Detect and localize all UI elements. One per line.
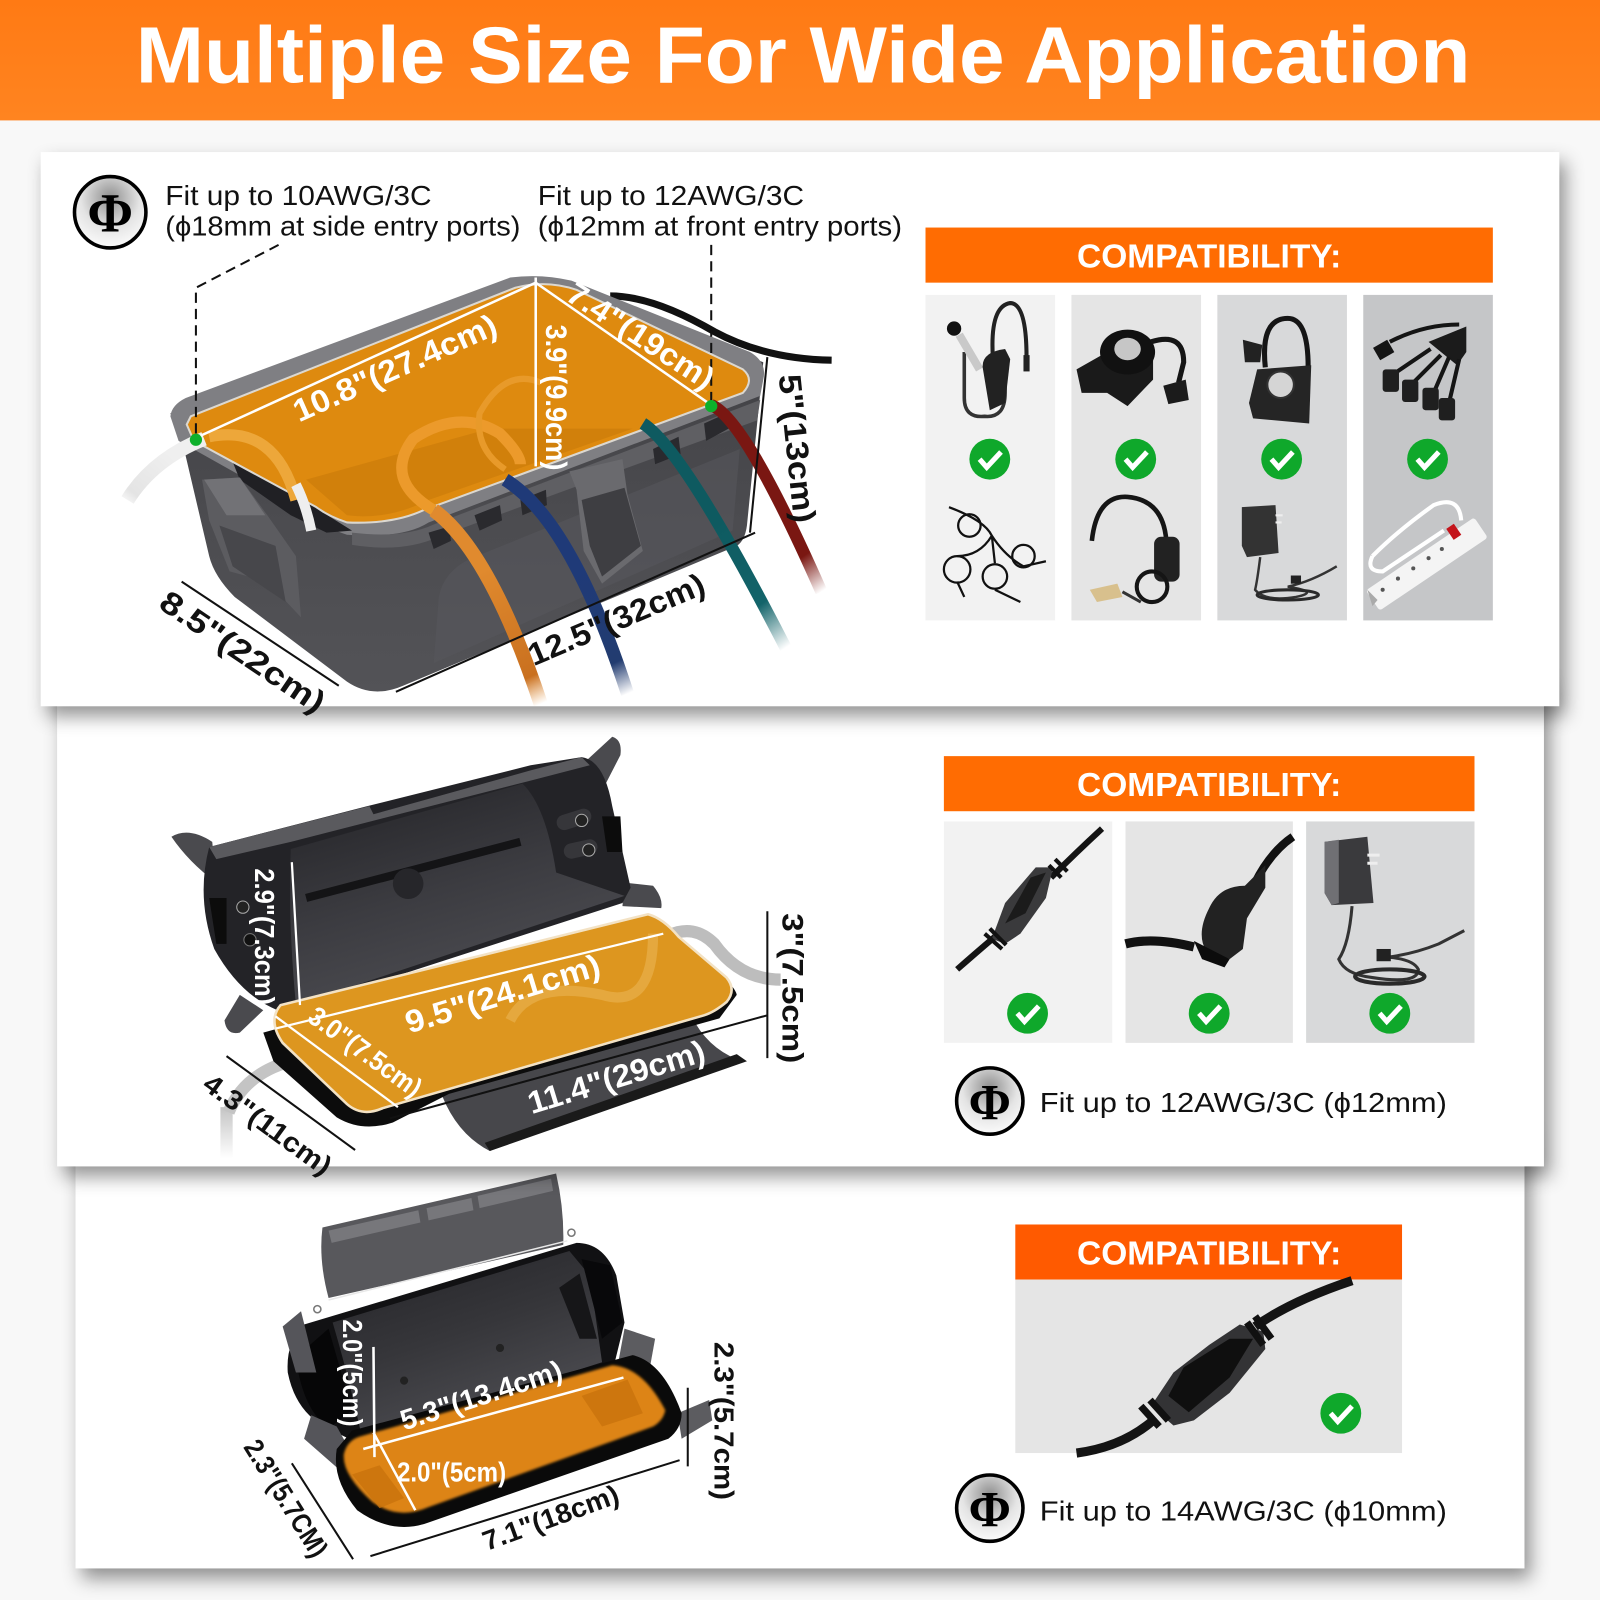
device: inline connector: [944, 821, 1112, 1043]
medium box product image: 3"(7.5cm): [776, 913, 809, 1063]
dark interior at front-left corner: [230, 454, 352, 533]
medium box product image: 11.4"(29cm): [523, 1033, 709, 1121]
black measure lines: [182, 357, 767, 692]
heading: [1015, 1224, 1402, 1280]
orange opening: [187, 284, 749, 523]
panel: medium box: [57, 673, 1544, 1181]
white measure lines: [194, 278, 711, 466]
panel: large box: [41, 152, 1559, 720]
medium box product image: 4.3"(11cm): [197, 1068, 338, 1181]
tabs on lower half: [304, 1415, 352, 1467]
small box product image: 7.1"(18cm): [478, 1479, 623, 1557]
orange inner tray: [344, 1365, 665, 1513]
heading: [944, 756, 1474, 811]
blue cable: [505, 480, 628, 694]
clip ears: [171, 737, 662, 1033]
small box product image: [238, 1173, 739, 1563]
cable size note: [957, 1068, 1447, 1134]
check icon: [1261, 439, 1302, 480]
compatibility block: small box: [957, 1224, 1447, 1541]
compatibility block: medium box: [944, 756, 1474, 1134]
check icon: [1369, 993, 1410, 1034]
title: Multiple Size For Wide Application: [136, 11, 1470, 100]
check icon: [1189, 993, 1230, 1034]
fabric flap: [439, 1010, 737, 1151]
black measure lines: [292, 1388, 688, 1559]
cable size note: side and front ports: (ϕ12mm at front entry ports): [538, 211, 902, 242]
device photo: inline cord connector: [1015, 1280, 1402, 1453]
teal cable: [643, 423, 786, 648]
latches and clips: [202, 478, 301, 617]
large box product image: 5"(13cm): [772, 372, 823, 524]
rim: [170, 276, 764, 536]
small box product image: 2.0"(5cm): [397, 1457, 506, 1488]
open lid: [204, 757, 631, 1010]
white cable: [128, 439, 204, 500]
cable size note: side and front ports: [74, 177, 902, 248]
labels: 10.8"(27.4cm): [287, 307, 502, 429]
check icon: [969, 439, 1010, 480]
heading: COMPATIBILITY:: [1077, 767, 1341, 804]
cables inside opening: [209, 435, 296, 500]
check icon: [1407, 439, 1448, 480]
orange tray: [274, 914, 732, 1112]
medium box product image: 9.5"(24.1cm): [401, 947, 604, 1040]
lower half body: [336, 1355, 682, 1527]
labels: 2.9"(7.3cm): [249, 868, 280, 1005]
check icon: [1007, 993, 1048, 1034]
heading: [926, 228, 1493, 283]
small box product image: 2.3"(5.7cm): [708, 1342, 739, 1500]
tray black outline: [263, 923, 737, 1127]
medium box product image: 3.0"(7.5cm): [303, 1000, 428, 1103]
heading: COMPATIBILITY:: [1077, 1235, 1341, 1272]
black measure lines: [227, 911, 767, 1150]
cable size note: Φ: [969, 1483, 1011, 1539]
medium box product image: [171, 737, 809, 1181]
small box product image: 2.3"(5.7CM): [238, 1434, 334, 1563]
large box product image: 7.4"(19cm): [560, 275, 721, 397]
large box product image: [128, 245, 832, 720]
large box product image: 3.9"(9.9cm): [539, 324, 572, 470]
cable size note: side and front ports: Φ: [87, 183, 133, 244]
red cable: [711, 405, 821, 592]
heading: COMPATIBILITY:: [1077, 238, 1341, 275]
dashed leader lines: [196, 245, 711, 439]
rear black cable: [610, 296, 832, 360]
small box product image: 5.3"(13.4cm): [396, 1355, 566, 1437]
column 4: splitter cord and power strip: [1363, 295, 1493, 620]
column 3: mechanical timer and adapter: [1217, 295, 1347, 620]
cable size note: side and front ports: (ϕ18mm at side entry ports): [165, 211, 520, 242]
white measure lines: [363, 1347, 623, 1510]
box body: [170, 278, 763, 691]
check icon: [1115, 439, 1156, 480]
large box product image: 8.5"(22cm): [153, 583, 332, 720]
open upper half: [288, 1243, 624, 1444]
column 1: EV charger and splitter: [926, 295, 1055, 620]
column 2: outlet timer and GFCI cord: [1071, 295, 1201, 620]
cable size note: side and front ports: Fit up to 12AWG/3C: [538, 180, 804, 211]
cable size note: side and front ports: Fit up to 10AWG/3C: [165, 180, 432, 211]
device: angled plug: [1126, 821, 1293, 1043]
orange cable: [434, 510, 541, 704]
cable size note: Fit up to 12AWG/3C (ϕ12mm): [1040, 1087, 1447, 1118]
cable size note: Fit up to 14AWG/3C (ϕ10mm): [1040, 1495, 1447, 1526]
large box product image: 12.5"(32cm): [522, 566, 710, 673]
cable size note: [957, 1475, 1447, 1541]
panel: small box: [76, 1122, 1524, 1568]
title banner: [0, 0, 1600, 120]
device: power adapter: [1306, 821, 1474, 1043]
white measure lines: [276, 862, 663, 1107]
cable size note: Φ: [969, 1075, 1011, 1131]
lid flap: [321, 1173, 563, 1298]
labels: 2.0"(5cm): [337, 1319, 368, 1427]
compatibility block: large box: [926, 228, 1493, 620]
cables: [668, 931, 781, 980]
check icon: [1320, 1393, 1361, 1434]
green port markers: [190, 400, 717, 446]
